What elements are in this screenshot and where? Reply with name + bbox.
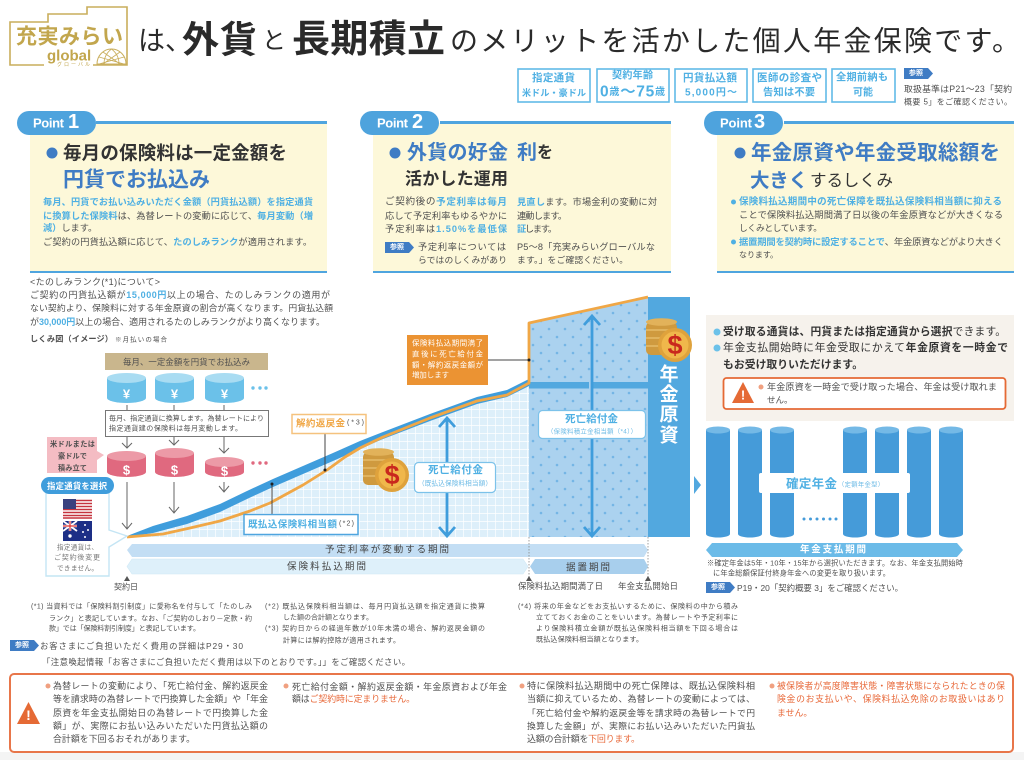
reference: 費用: 「注意喚起情報「お客さまにご負担いただく費用は以下のとおりです。」」をご確認ください。 xyxy=(42,657,410,667)
icon: dollar cylinders: $ xyxy=(123,462,131,478)
timeline: dates xyxy=(114,537,678,592)
label: monthly yen payment xyxy=(105,353,268,370)
logo: 充実みらい global: グローバル xyxy=(57,61,90,68)
panel: point 2: 証します。 xyxy=(517,224,557,234)
feature box: 指定通貨: 指定通貨 xyxy=(532,71,576,84)
logo: 充実みらい global xyxy=(10,7,127,68)
logo: 充実みらい global: 充実みらい xyxy=(16,26,123,48)
period bar: 予定利率が変動する期間 xyxy=(127,544,648,557)
callout: 払込期間満了直後: 直後に死亡給付金 xyxy=(412,350,484,358)
feature box: 指定通貨 xyxy=(518,69,590,102)
callout: 払込期間満了直後: 保険料払込期間満了 xyxy=(412,338,483,348)
callout: 解約返戻金 xyxy=(292,414,366,472)
annuity cylinders xyxy=(706,426,963,538)
warning box: せん。 xyxy=(767,395,793,405)
warning column 1: 等を請求時の為替レートで円換算した金額」や「年金 xyxy=(53,693,268,704)
label: 死亡給付金 既払込: 死亡給付金 xyxy=(428,463,484,476)
warning column 3: 特に保険料払込期間中の死亡保障は、既払込保険料相 xyxy=(527,680,755,691)
icon: yen cylinders: ¥ xyxy=(221,386,229,402)
warning box: ! xyxy=(741,388,745,402)
panel: point 1: に換算した保険料は、為替レートの変動に応じて、毎月変動（増 xyxy=(43,210,313,221)
feature box: 医師の診査や告知は不要: 告知は不要 xyxy=(763,86,815,98)
feature box: 全期前納も可能: 可能 xyxy=(853,86,873,98)
footnotes 2 and 3: (*2) 既払込保険料相当額は、毎月円貨払込額を指定通貨に換算 xyxy=(265,602,485,610)
label: 死亡給付金 既払込 xyxy=(414,462,496,492)
label: monthly yen payment: 毎月、一定金額を円貨でお払込み xyxy=(123,357,250,367)
panel: 受取通貨: もお受け取りいただけます。 xyxy=(723,357,863,371)
warning box: 年金原資を一時金で受け取った場合、年金は受け取れま xyxy=(767,381,997,392)
text block: たのしみランク: ない契約より、保険料に対する年金原資の割合が高くなります。円貨払込額 xyxy=(30,302,333,313)
curve: 死亡給付金 blue band xyxy=(127,379,529,537)
feature box: 全期前納も可能 xyxy=(832,69,895,102)
icon: coins on 年金原資 xyxy=(646,318,692,362)
heading: しくみ図: ※月払いの場合 xyxy=(115,334,168,344)
panel: point 3: しくみとしています。 xyxy=(739,223,822,233)
reference: P19-20: P19・20「契約概要 3」をご確認ください。 xyxy=(737,583,903,593)
icon: yen cylinders xyxy=(107,373,268,403)
panel: point 1: 毎月、円貨でお払い込みいただく金額（円貨払込額）を指定通貨 xyxy=(43,196,313,207)
panel: 受取通貨 xyxy=(706,315,1014,421)
title: は、 xyxy=(138,26,192,56)
footnotes 2 and 3: 計算には解約控除が適用されます。 xyxy=(283,636,400,644)
panel: 受取通貨: 受け取る通貨は、円貨または指定通貨から選択できます。 xyxy=(723,325,1006,338)
warning column 1: 為替レートの変動により、「死亡給付金、解約返戻金 xyxy=(53,680,268,691)
footnotes 2 and 3: (*3) 契約日からの経過年数が10年未満の場合、解約返戻金額の xyxy=(265,624,485,632)
label: 米ドルまたは豪ドルで積み立て xyxy=(47,437,104,473)
panel: point 3: 大きく xyxy=(750,170,808,192)
column: 年金原資 xyxy=(648,297,690,537)
title xyxy=(138,19,1020,61)
warning column 3: 換算した金額」が、実際にお払い込みいただいた円貨払 xyxy=(527,720,755,731)
panel: point 2: Point xyxy=(377,116,409,130)
warning column 1: 合計額を下回るおそれがあります。 xyxy=(53,733,195,744)
curve: 解約返戻金 orange line xyxy=(127,297,648,537)
panel: point 2: 連動します。 xyxy=(517,210,567,221)
title: 長期積立 xyxy=(292,19,445,61)
callout: 払込期間満了直後: 額・解約返戻金額が xyxy=(412,360,484,370)
panel: point 2: P5～8「充実みらいグローバルな xyxy=(517,241,655,252)
icon: dollar cylinders: $ xyxy=(221,464,229,478)
panel: point 3: ことで保険料払込期間満了日以後の年金原資などが大きくなる xyxy=(739,209,1003,220)
footnote 4: より保険料積立金額が既払込保険料相当額を下回る場合は xyxy=(536,624,738,632)
text block: たのしみランク xyxy=(30,277,333,327)
icon: warning triangle xyxy=(17,702,40,724)
footnote 4: 立てておくお金のことをいいます。為替レートや予定利率に xyxy=(536,612,738,622)
warning column 2: 死亡給付金額・解約返戻金額・年金原資および年金 xyxy=(292,681,507,692)
footnote 4: 既払込保険料相当額となります。 xyxy=(536,634,643,644)
arrows: conversion xyxy=(122,405,229,529)
footnote 4: (*4) 将来の年金などをお支払いするために、保険料の中から積み xyxy=(518,602,738,610)
warning column 2 xyxy=(284,681,507,704)
callout: 解約返戻金: 解約返戻金 xyxy=(296,418,345,430)
callout: 既払込保険料相当額: (*2) xyxy=(339,520,354,528)
callout: 既払込保険料相当額: 既払込保険料相当額 xyxy=(248,518,337,530)
warning column 1: 額」が、実際にお払い込みいただいた円貨払込額の xyxy=(53,720,268,731)
label: 確定年金: （定額年金型） xyxy=(838,480,884,488)
panel: point 2: 予定利率については xyxy=(418,241,506,252)
callout: 解約返戻金: (*3) xyxy=(347,420,364,426)
warning column 4: 被保険者が高度障害状態・障害状態になられたときの保 xyxy=(777,680,1005,691)
panel: point 3: Point xyxy=(720,116,753,130)
feature box: 円貨払込額: 円貨払込額 xyxy=(683,71,738,84)
heading: しくみ図: しくみ図（イメージ） xyxy=(30,334,113,344)
warning column 3 xyxy=(520,680,755,744)
panel: point 3 xyxy=(704,111,1014,273)
text box: conversion note xyxy=(106,410,268,436)
callout: 払込期間満了直後 xyxy=(407,335,530,385)
panel: point 1 xyxy=(17,111,327,273)
icon: Australian flag xyxy=(63,521,92,541)
footnote 1: 款」では「保険料割引制度」と表記しています。 xyxy=(49,624,200,632)
label: 米ドルまたは豪ドルで積み立て: 豪ドルで xyxy=(58,452,87,460)
column: 年金原資: 資 xyxy=(659,424,679,446)
chart area: grid region under curve xyxy=(127,379,529,537)
feature box: 契約年齢: 契約年齢 xyxy=(612,68,653,82)
footnotes 2 and 3: した額の合計額となります。 xyxy=(283,612,373,622)
panel: point 3: 保険料払込期間中の死亡保障を既払込保険料相当額に抑える xyxy=(739,196,1002,208)
heading: しくみ図 xyxy=(30,334,168,344)
text block: たのしみランク: が30,000円以上の場合、適用されるたのしみランクがより高くなります。 xyxy=(30,316,325,327)
icon: US flag xyxy=(63,499,92,519)
note: 確定年金 xyxy=(707,558,963,578)
feature box: 契約年齢 xyxy=(597,68,669,102)
panel: point 2: を xyxy=(537,144,553,162)
reference note: top right: 概要 5」をご確認ください。 xyxy=(904,96,1012,106)
panel: 指定通貨を選択: ご契約後変更 xyxy=(54,552,100,562)
warning column 4: 険金のお支払いや、保険料払込免除のお取扱いはあり xyxy=(777,693,1005,704)
feature box: 医師の診査や告知は不要: 医師の診査や xyxy=(757,71,822,84)
footnote 1: ランク」と表記しています。なお、「ご契約のしおり－定款・約 xyxy=(49,614,252,622)
warning column 4: ません。 xyxy=(777,708,812,718)
warning column 3: 「死亡給付金や解約返戻金等を請求時の為替レートで円 xyxy=(527,707,755,718)
icon: yen cylinders: ¥ xyxy=(171,386,179,402)
panel: point 2: 利 xyxy=(517,141,537,164)
reference note: top right xyxy=(904,68,1012,106)
panel: point 2: 見直します。市場金利の変動に対 xyxy=(517,196,657,207)
label: 死亡給付金 積立金: （保険料積立金相当額（*4）） xyxy=(547,426,637,436)
panel: point 3: 3 xyxy=(754,111,765,133)
panel: point 1: 毎月の保険料は一定金額を xyxy=(63,142,287,164)
reference note: top right: 取扱基準はP21～23「契約 xyxy=(904,83,1012,94)
footnote 4 xyxy=(518,602,738,644)
warning column 3: 込額の合計額を下回ります。 xyxy=(527,733,640,744)
feature box: 円貨払込額 xyxy=(675,69,747,102)
panel: bottom warning xyxy=(10,674,1013,752)
panel: 指定通貨を選択: 指定通貨を選択 xyxy=(47,481,108,491)
panel: point 2 xyxy=(360,111,671,273)
warning column 1 xyxy=(46,680,268,744)
footnote 1: (*1) 当資料では「保険料割引制度」に愛称名を付与して「たのしみ xyxy=(31,602,252,610)
panel: 指定通貨を選択 xyxy=(41,477,127,576)
label: 米ドルまたは豪ドルで積み立て: 米ドルまたは xyxy=(50,440,95,448)
reference: 費用 xyxy=(10,640,410,667)
feature box: 指定通貨: 米ドル・豪ドル xyxy=(522,87,586,98)
timeline: dates: 契約日 xyxy=(114,582,138,592)
period bar: 据置期間 xyxy=(530,559,648,574)
column: 年金原資: 年 xyxy=(659,362,679,386)
panel: point 2: 活かした運用 xyxy=(405,170,508,188)
footer shade xyxy=(0,752,1024,760)
feature box: 全期前納も可能: 全期前納も xyxy=(836,70,888,84)
chart area: deferral dotted region xyxy=(529,297,648,537)
label: 確定年金 xyxy=(759,473,910,493)
panel: point 3: 年金原資や年金受取総額を xyxy=(751,142,1000,164)
icon: dollar cylinders xyxy=(107,448,268,478)
callout: 既払込保険料相当額 xyxy=(244,482,358,534)
arrow: 死亡給付金 (左) xyxy=(439,418,455,536)
footnotes 2 and 3 xyxy=(265,602,485,644)
period bar: 保険料払込期間: 保険料払込期間 xyxy=(287,560,366,572)
panel: point 2: らではのしくみがあり xyxy=(418,254,507,265)
text box: conversion note: 毎月、指定通貨に換算します。為替レートにより xyxy=(109,414,264,422)
panel: 指定通貨を選択: できません。 xyxy=(57,564,98,572)
warning column 2: 額はご契約時に定まりません。 xyxy=(292,693,415,704)
label: 確定年金: 確定年金 xyxy=(786,476,837,491)
icon: yen cylinders: ¥ xyxy=(123,386,131,402)
title: と xyxy=(262,28,286,54)
period bar: 据置期間: 据置期間 xyxy=(566,562,610,574)
period bar: 年金支払期間 xyxy=(706,543,963,557)
title: 外貨 xyxy=(182,20,257,60)
text block: たのしみランク: <たのしみランク(*1)について> xyxy=(30,277,160,287)
warning box xyxy=(724,378,1006,409)
panel: point 1: 円貨でお払込み xyxy=(63,168,210,192)
panel: point 2: 2 xyxy=(412,111,423,133)
label: 死亡給付金 積立金: 死亡給付金 xyxy=(565,412,618,425)
label: 死亡給付金 既払込: （既払込保険料相当額） xyxy=(418,478,492,488)
warning column 4 xyxy=(770,680,1005,718)
feature box: 円貨払込額: 5,000円～ xyxy=(685,86,737,98)
panel: point 2: ご契約後の予定利率は毎月 xyxy=(385,196,507,208)
panel: point 1: 減）します。 xyxy=(43,222,97,233)
panel: point 2: 外貨の好金 xyxy=(407,140,508,164)
label: 米ドルまたは豪ドルで積み立て: 積み立て xyxy=(58,464,87,472)
panel: point 1: Point xyxy=(33,116,65,130)
panel: point 3: なります。 xyxy=(739,250,778,260)
column: 年金原資: 原 xyxy=(659,404,679,426)
period bar: 予定利率が変動する期間: 予定利率が変動する期間 xyxy=(325,544,449,556)
timeline: dates: 保険料払込期間満了日 xyxy=(518,581,603,591)
panel: point 2: 応して予定利率もゆるやかに xyxy=(385,210,507,221)
warning column 3: 当額に抑えているため、為替レートの変動によっては、 xyxy=(527,693,755,704)
period bar: 保険料払込期間 xyxy=(127,559,528,574)
callout: 払込期間満了直後: 増加します xyxy=(412,370,449,380)
text block: たのしみランク: ご契約の円貨払込額が15,000円以上の場合、たのしみランクの適用が xyxy=(30,289,330,300)
panel: point 3: するしくみ xyxy=(810,172,893,190)
label: 死亡給付金 積立金 xyxy=(538,410,646,438)
title: のメリットを活かした個人年金保険です。 xyxy=(450,26,1020,56)
note: 確定年金: ※確定年金は5年・10年・15年から選択いただきます。なお、年金支払開始時 xyxy=(707,558,963,568)
icon: coins on curve xyxy=(363,448,409,492)
arrow: to annuity xyxy=(694,476,701,494)
logo: 充実みらい global: global xyxy=(47,48,91,64)
period bar: 年金支払期間: 年金支払期間 xyxy=(800,544,866,556)
panel: point 3: 据置期間を契約時に設定することで、年金原資などがより大きく xyxy=(739,236,1003,247)
warning column 1: 原資を年金支払開始日の為替レートで円換算した金 xyxy=(53,707,268,718)
column: 年金原資: 金 xyxy=(659,384,679,406)
feature box: 医師の診査や告知は不要 xyxy=(753,69,826,102)
panel: 指定通貨を選択: 指定通貨は、 xyxy=(57,542,98,552)
icon: dollar cylinders: $ xyxy=(171,462,179,478)
footnote 1 xyxy=(31,602,252,632)
arrow: 死亡給付金 (右) xyxy=(584,316,600,536)
feature box: 契約年齢: 0歳～75歳 xyxy=(600,84,665,100)
timeline: dates: 年金支払開始日 xyxy=(618,581,678,591)
icon: warning triangle: ! xyxy=(26,707,31,723)
text box: conversion note: 指定通貨建の保険料は毎月変動します。 xyxy=(109,424,242,432)
panel: 受取通貨: 年金支払開始時に年金受取にかえて年金原資を一時金で xyxy=(723,340,1008,354)
note: 確定年金: に年金総額保証付終身年金への変更を取り扱います。 xyxy=(713,568,890,578)
panel: point 2: ます。」をご確認ください。 xyxy=(517,254,628,265)
panel: point 1: ご契約の円貨払込額に応じて、たのしみランクが適用されます。 xyxy=(43,236,312,247)
reference: 費用: お客さまにご負担いただく費用の詳細はP29・30 xyxy=(40,641,243,651)
panel: point 2: 予定利率は1.50%を最低保 xyxy=(385,223,508,234)
panel: point 1: 1 xyxy=(68,111,79,133)
